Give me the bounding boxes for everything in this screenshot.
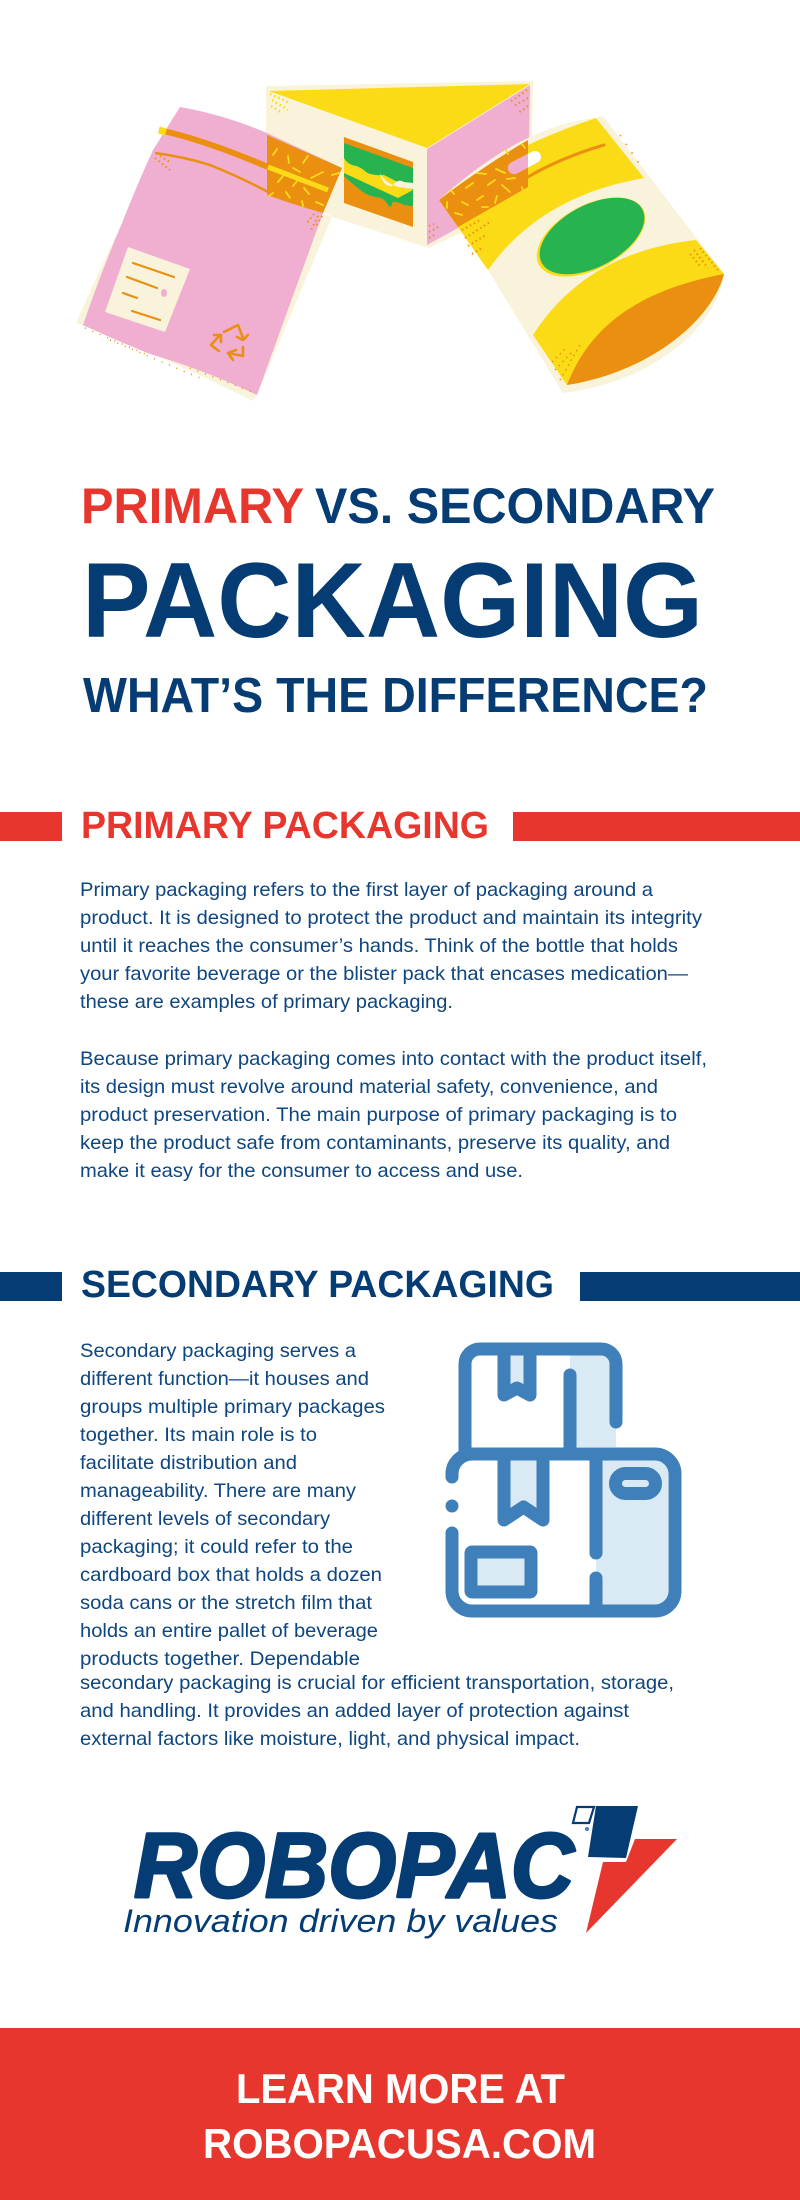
pouch label xyxy=(105,247,190,332)
text block: secondary packaging: external factors like moisture, light, and physical impact. xyxy=(80,1728,580,1750)
text block: primary packaging: make it easy for the consumer to access and use. xyxy=(80,1160,523,1182)
illustration: three packages xyxy=(76,81,724,401)
zipper sprinkles xyxy=(269,149,339,206)
title line 2: PACKAGING xyxy=(82,540,703,660)
text block: secondary packaging: manageability. There are many xyxy=(80,1480,356,1502)
text block: primary packaging: Because primary packaging comes into contact with the product itself, xyxy=(80,1048,707,1070)
text block: primary packaging: keep the product safe from contaminants, preserve its quality, and xyxy=(80,1132,670,1154)
logo: Robopac xyxy=(123,1806,677,1939)
text block: secondary packaging: together. Its main role is to xyxy=(80,1424,317,1446)
heading bar: secondary packaging xyxy=(0,1264,800,1306)
text block: secondary packaging: different function—it houses and xyxy=(80,1368,369,1390)
text block: secondary packaging: different levels of secondary xyxy=(80,1508,330,1530)
text block: secondary packaging: soda cans or the stretch film that xyxy=(80,1592,373,1614)
title line 1: PRIMARY xyxy=(81,478,304,534)
text block: secondary packaging: groups multiple primary packages xyxy=(80,1396,385,1418)
text block: primary packaging: until it reaches the consumer’s hands. Think of the bottle that holds xyxy=(80,935,678,957)
text block: secondary packaging: and handling. It provides an added layer of protection against xyxy=(80,1700,630,1722)
heading bar: primary packaging: PRIMARY PACKAGING xyxy=(81,805,489,847)
icon: stacked boxes xyxy=(452,1349,675,1611)
title line 1: VS. SECONDARY xyxy=(315,478,715,534)
logo tagline: Innovation driven by values xyxy=(123,1903,558,1939)
package: sandwich box xyxy=(266,81,533,248)
heading bar: primary packaging xyxy=(0,805,800,847)
text block: secondary packaging: Secondary packaging serves a xyxy=(80,1340,356,1362)
title xyxy=(81,478,715,723)
text block: secondary packaging: holds an entire pallet of beverage xyxy=(80,1620,378,1642)
text block: primary packaging: your favorite beverage or the blister pack that encases medication— xyxy=(80,963,689,985)
footer call to action: LEARN MORE AT xyxy=(236,2065,565,2112)
footer call to action: ROBOPACUSA.COM xyxy=(203,2120,596,2167)
package: yellow snack bag xyxy=(439,116,724,393)
text block: primary packaging: its design must revolve around material safety, convenience, and xyxy=(80,1076,658,1098)
text block: secondary packaging: packaging; it could refer to the xyxy=(80,1536,353,1558)
heading bar: secondary packaging: SECONDARY PACKAGING xyxy=(81,1264,554,1306)
logo mark xyxy=(573,1806,677,1933)
text block: secondary packaging xyxy=(80,1340,674,1750)
icon: recycle arrows xyxy=(211,325,248,360)
title line 3: WHAT’S THE DIFFERENCE? xyxy=(83,669,708,723)
text block: secondary packaging: products together. Dependable xyxy=(80,1648,360,1670)
text block: primary packaging: product. It is designed to protect the product and maintain its integrity xyxy=(80,907,702,929)
text block: secondary packaging: secondary packaging is crucial for efficient transportation, storage, xyxy=(80,1672,674,1694)
text block: primary packaging xyxy=(80,879,707,1182)
title line 1 xyxy=(81,478,715,534)
text block: primary packaging: these are examples of primary packaging. xyxy=(80,991,453,1013)
footer call to action xyxy=(0,2028,800,2200)
package: pink pouch xyxy=(76,107,342,401)
text block: primary packaging: product preservation. The main purpose of primary packaging is to xyxy=(80,1104,677,1126)
text block: secondary packaging: cardboard box that holds a dozen xyxy=(80,1564,382,1586)
text block: primary packaging: Primary packaging refers to the first layer of packaging around a xyxy=(80,879,653,901)
text block: secondary packaging: facilitate distribution and xyxy=(80,1452,297,1474)
logo wordmark: ROBOPAC xyxy=(134,1815,575,1917)
